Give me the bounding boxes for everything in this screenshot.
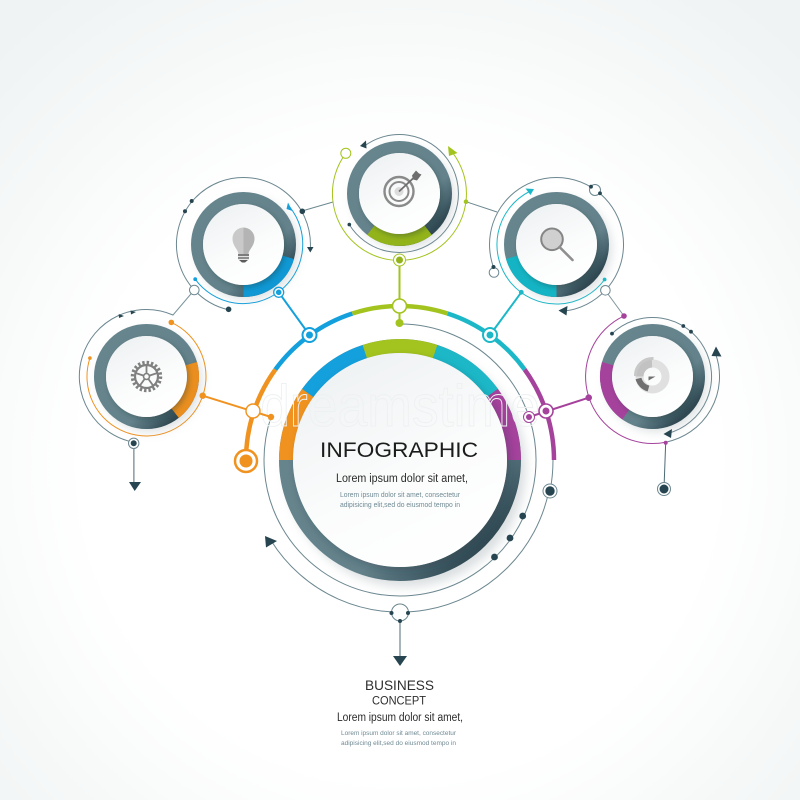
ring segment: teal [435,352,492,393]
node: bottom [390,604,410,623]
outer arc segments [246,306,554,460]
circle: magnifier (teal) [489,177,624,316]
node: teal junction [483,328,497,342]
node: orange end [235,450,257,472]
ring segment: purple [492,393,514,460]
arrow: left main [265,536,277,548]
arrow: bottom [393,656,407,666]
business concept text block: CONCEPT [372,696,426,708]
watermark: dreamstime [260,374,540,439]
central ring [286,346,526,587]
main connector lines [264,324,553,657]
node: orange junction [246,404,260,418]
ring segment: green [365,346,435,352]
title text block: adipisicing elit,sed do eiusmod tempo in [340,502,460,509]
title text block: Lorem ipsum dolor sit amet, consectetur [340,492,461,499]
node: blue junction [302,328,316,342]
node: green dot [396,319,404,327]
icon: gear [132,362,160,390]
business concept text block [337,678,463,747]
icon: light bulb [232,228,254,262]
business concept text block: BUSINESS [365,678,434,693]
circle: gear (orange) [79,309,206,491]
circle: bulb (blue) [176,177,314,312]
central white disc [293,353,507,567]
title text block: INFOGRAPHIC [320,439,478,462]
node: dark right [543,484,557,498]
dots on inner ring [491,513,526,560]
circle: target (green) [332,135,468,266]
ring segment: blue [308,352,365,393]
business concept text block: Lorem ipsum dolor sit amet, [337,712,463,724]
node: purple small [524,412,534,422]
icon: magnifier [541,228,572,260]
icon: donut chart [635,358,666,390]
ring segment: orange [286,393,308,460]
title text block [320,439,478,509]
node: purple junction [539,404,553,418]
icon: target with arrow [384,170,422,206]
node: orange dot [268,414,274,420]
business concept text block: adipisicing elit,sed do eiusmod tempo in [341,740,456,747]
connectors to satellite circles [173,202,624,417]
title text block: Lorem ipsum dolor sit amet, [336,473,468,485]
business concept text block: Lorem ipsum dolor sit amet, consectetur [341,730,457,737]
circle: chart (purple) [585,313,722,496]
node: green junction [392,299,406,313]
ring base [286,346,514,574]
